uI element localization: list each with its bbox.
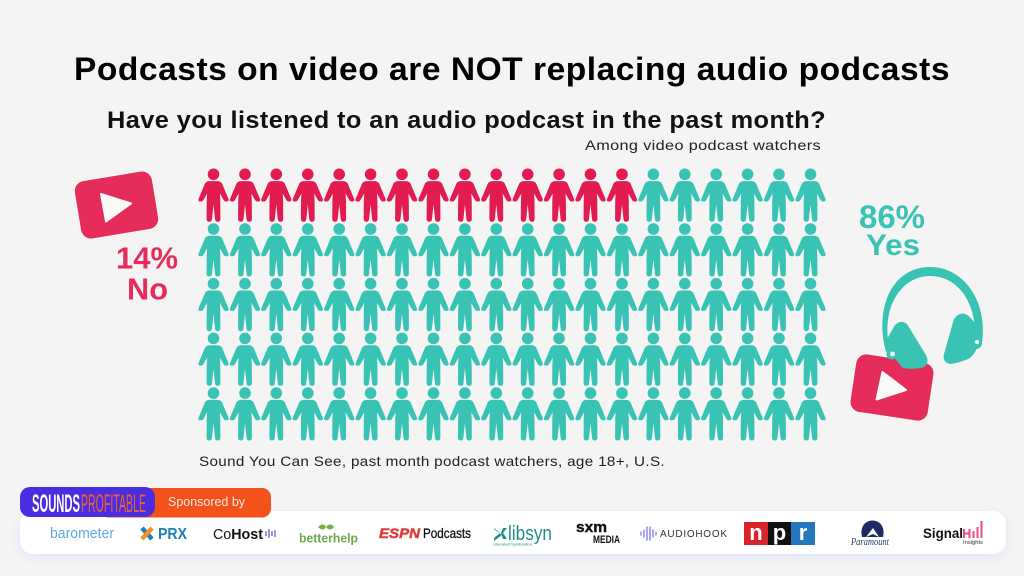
logo: betterhelp (299, 524, 358, 546)
icon: headphones (882, 267, 983, 368)
Sponsored by pill: Sponsored by (168, 495, 246, 509)
label: 14% No: No (127, 272, 168, 306)
row 1 (198, 168, 826, 222)
source note: Sound You Can See, past month podcast watchers, age 18+, U.S. (199, 453, 665, 469)
label: 14% No (116, 240, 178, 306)
label: 14% No: 14% (116, 240, 178, 276)
title: Podcasts on video are NOT replacing audio podcasts (74, 51, 950, 87)
text: PROFITABLE (81, 490, 146, 518)
logo: SXM Media: MEDIA (593, 534, 620, 546)
logo: libsyn: libsyn (508, 523, 552, 545)
icon: red video play button under headphones (849, 353, 935, 422)
logo: Signal Hill Insights (923, 521, 983, 546)
logo: PRX: PRX (158, 526, 188, 543)
logo: NPR (744, 520, 815, 545)
logo: CoHost: CoHost (213, 526, 263, 543)
logo: Paramount: Paramount (850, 536, 890, 548)
logo: libsyn (493, 523, 552, 546)
logo: Paramount (850, 520, 890, 548)
logo: Signal Hill Insights: Signal (923, 526, 963, 541)
Sponsored by pill (100, 488, 271, 518)
label: 86% Yes: 86% (859, 199, 925, 235)
logo: ESPN Podcasts: Podcasts (423, 525, 471, 541)
logo: PRX (142, 526, 188, 543)
label: 86% Yes (859, 199, 925, 262)
logo: libsyn: Liberated Syndication (493, 542, 532, 546)
label: 86% Yes: Yes (866, 229, 920, 262)
logo: NPR: n (749, 520, 763, 545)
logo: ESPN Podcasts (379, 525, 471, 541)
logo: betterhelp: betterhelp (299, 532, 358, 546)
row 5 (198, 387, 826, 440)
logo: Audiohook: AUDIOHOOK (660, 529, 727, 540)
icon: red video play button (73, 170, 160, 240)
row 2 (198, 223, 826, 276)
logo: Signal Hill Insights: Insights (963, 540, 983, 546)
logo: NPR: r (799, 520, 808, 545)
row 4 (198, 333, 826, 386)
subtitle question: Have you listened to an audio podcast in the past month? (107, 107, 826, 134)
population note: Among video podcast watchers (585, 137, 821, 153)
Sounds Profitable badge: SOUNDS (32, 490, 80, 518)
pictogram chart: 14 red and 86 teal people (198, 168, 826, 440)
logo: ESPN Podcasts: ESPN (379, 525, 421, 541)
logo: Audiohook (641, 527, 727, 540)
row 3 (198, 278, 826, 331)
logo: barometer: barometer (50, 525, 114, 542)
sponsor logo bar (20, 511, 1006, 554)
logo: SXM Media (576, 519, 620, 546)
logo: SXM Media: sxm (576, 519, 607, 536)
logo: NPR: p (773, 520, 786, 545)
